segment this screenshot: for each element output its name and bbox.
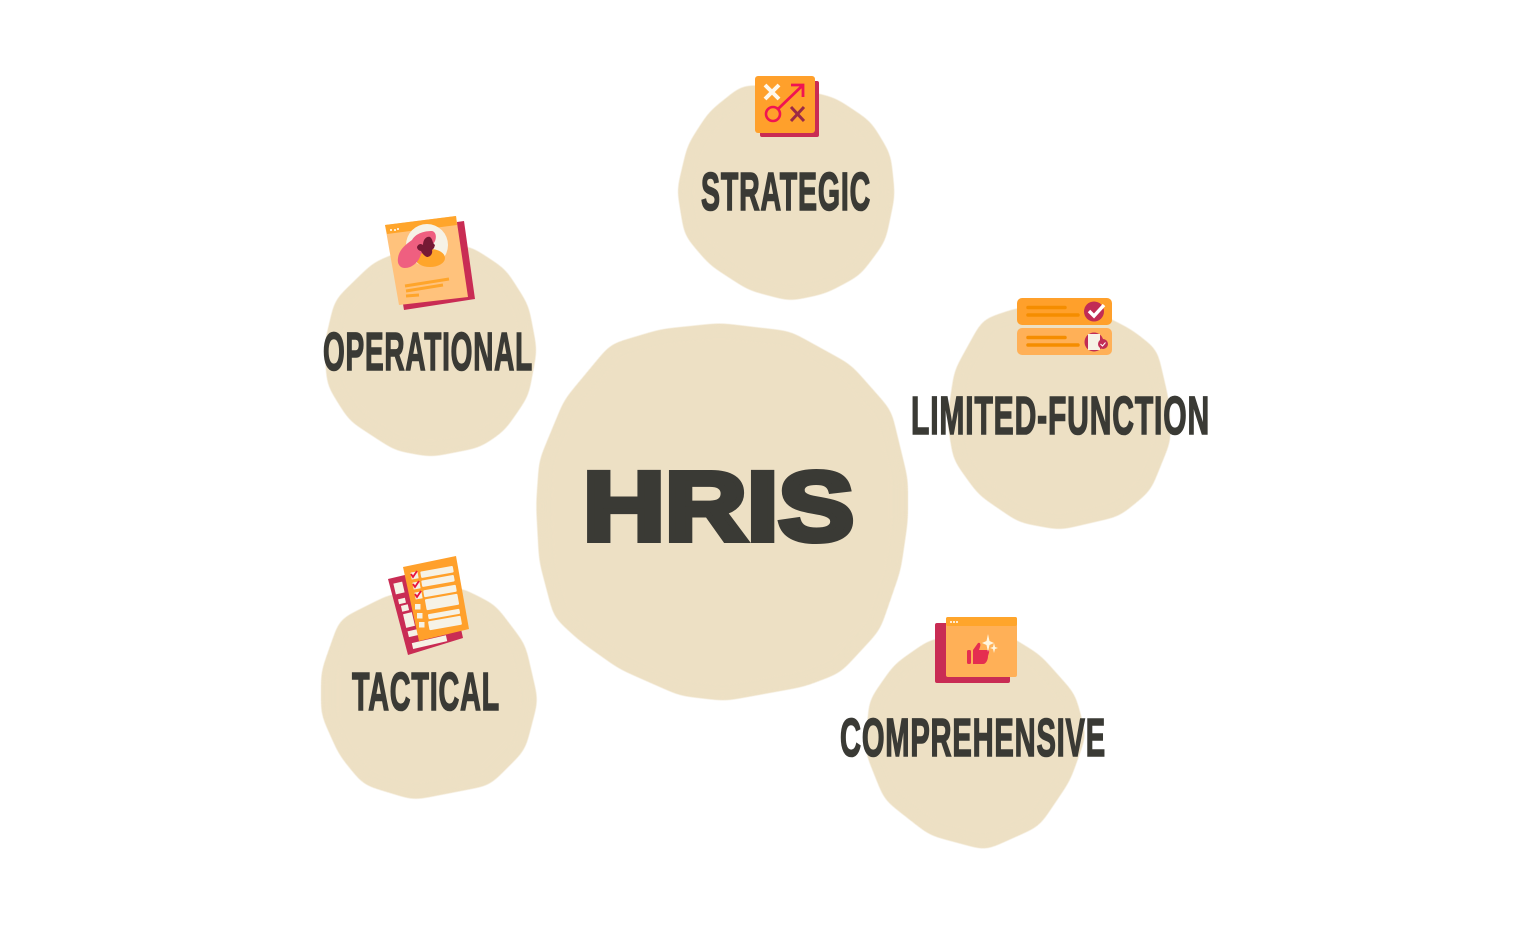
icon: checklist pages xyxy=(388,556,469,655)
label: operational: OPERATIONAL xyxy=(323,322,533,382)
panel: tactical xyxy=(329,556,530,792)
icon: thumbs-up window xyxy=(935,617,1017,683)
label: strategic: STRATEGIC xyxy=(701,162,871,222)
panel: strategic xyxy=(685,76,887,293)
heading: HRIS: HRIS xyxy=(583,452,854,561)
label: tactical: TACTICAL xyxy=(352,662,500,722)
central hub: HRIS xyxy=(544,331,900,693)
icon: strategy board xyxy=(755,76,819,137)
panel: operational xyxy=(323,216,533,449)
panel: comprehensive xyxy=(840,617,1106,842)
icon: profile document xyxy=(385,216,475,310)
icon: checklist cards xyxy=(1017,298,1112,355)
panel: limited-function xyxy=(911,298,1210,522)
label: comprehensive: COMPREHENSIVE xyxy=(840,708,1106,768)
label: limited-function: LIMITED-FUNCTION xyxy=(911,386,1210,446)
